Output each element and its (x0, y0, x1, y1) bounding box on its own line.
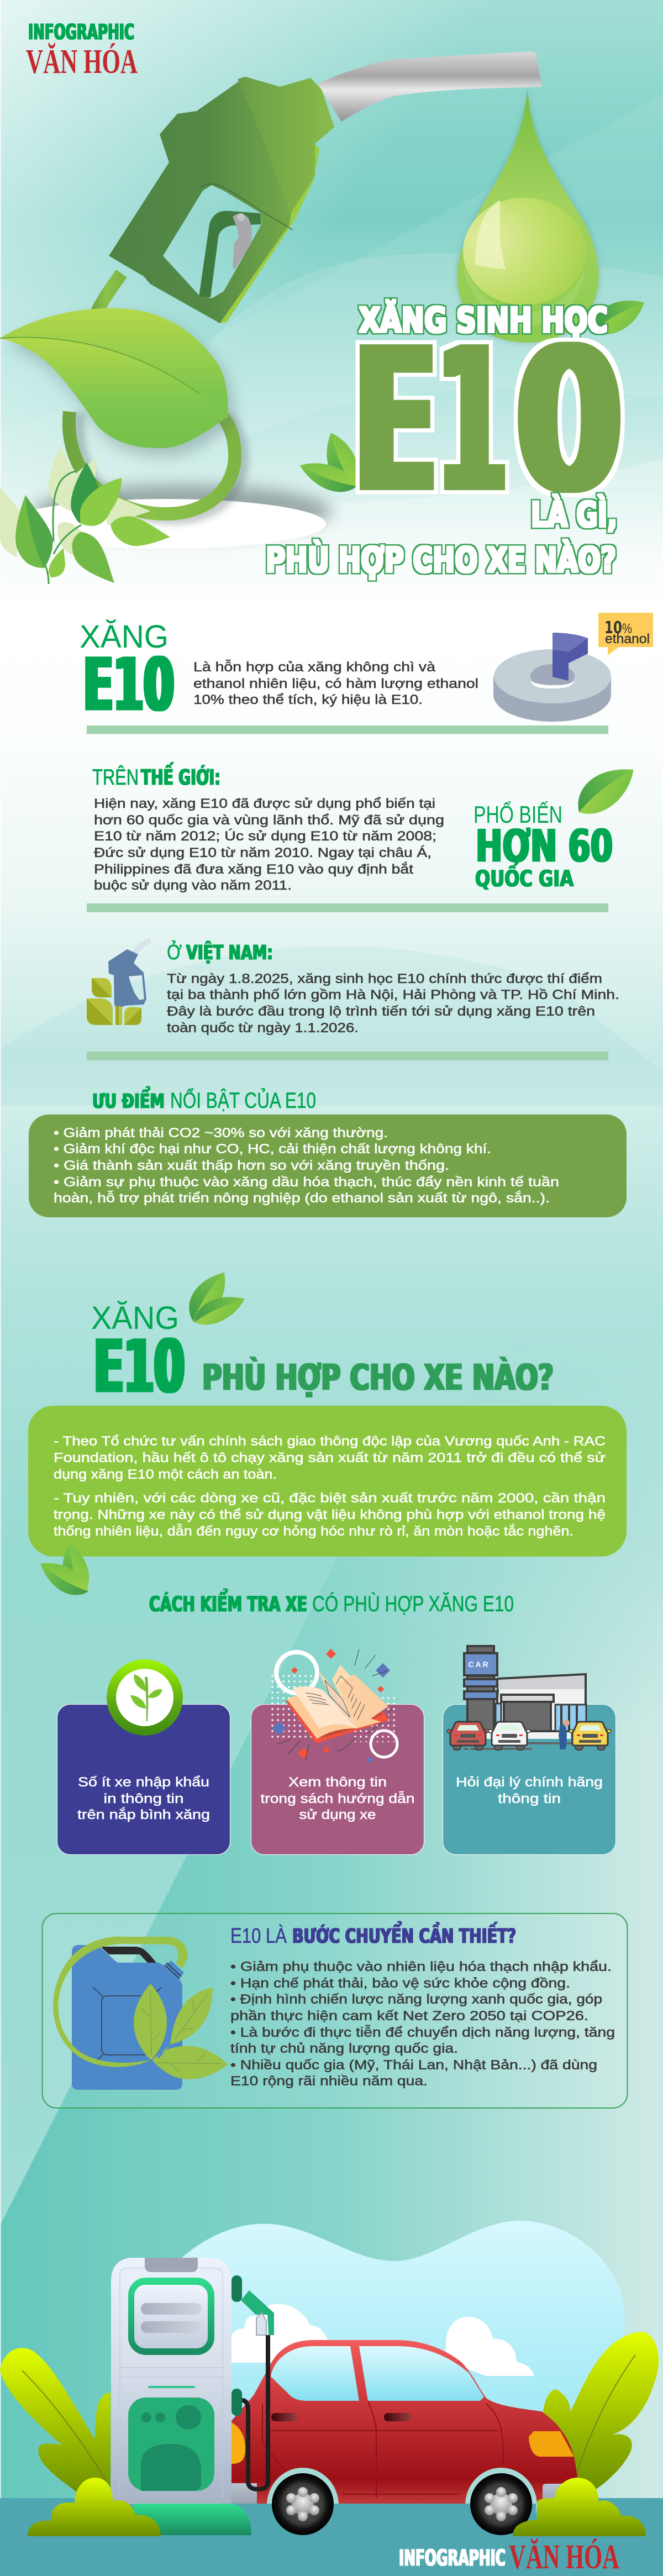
leaf pair (181, 1264, 249, 1332)
logo: Infographic Văn Hóa (26, 20, 138, 81)
heading: Trên thế giới: TRÊN (92, 765, 139, 790)
callout: 10% ethanol: 10 (604, 618, 622, 638)
scene: sky blob and clouds (182, 2221, 625, 2498)
panel: advantages: hoàn, hỗ trợ phát triển nông nghiệp (do ethanol sản xuất từ ngô, sắn..). (54, 1191, 550, 1206)
fuel drop (457, 89, 599, 343)
heading: Xăng E10: E10 (83, 643, 174, 728)
world text: hơn 60 quốc gia và vùng lãnh thổ. Mỹ đã sử dụng (94, 813, 444, 828)
section: phù hợp cho xe nào (28, 1264, 627, 1602)
small leaf cluster (0, 446, 170, 584)
heading: Xăng E10: XĂNG (80, 619, 169, 655)
reasons list: • Giảm phụ thuộc vào nhiên liệu hóa thạch nhập khẩu. (230, 1959, 612, 1974)
section heading: cách kiểm tra: CÁCH KIỂM TRA XE (149, 1589, 307, 1616)
leaf (568, 755, 643, 824)
leaf pair lower (34, 1541, 94, 1602)
callout: phổ biến hơn 60 quốc gia: HƠN 60 (476, 821, 613, 872)
panel: advantages (29, 1114, 627, 1217)
big E10: 1 (438, 305, 506, 538)
definition text: ethanol nhiên liệu, có hàm lượng ethanol (193, 676, 478, 691)
hero title (266, 300, 622, 580)
hose and nozzle (231, 2275, 274, 2489)
definition text (193, 660, 478, 707)
heading (230, 1921, 516, 1948)
reasons list: • Định hình chiến lược năng lượng xanh quốc gia, góp (230, 1992, 602, 2007)
heading: Trên thế giới (92, 763, 220, 790)
heading: BƯỚC CHUYỂN CẦN THIẾT? (292, 1921, 516, 1948)
heading: Ưu điểm nổi bật: NỔI BẬT CỦA E10 (170, 1087, 316, 1113)
panel: suitability: Foundation, hầu hết ô tô chạy xăng sản xuất từ năm 2011 trở đi đều có thể sử (54, 1450, 606, 1465)
world text: Hiện nay, xăng E10 đã được sử dụng phổ biến tại (94, 796, 435, 811)
reasons list: • Hạn chế phát thải, bảo vệ sức khỏe cộng đồng. (230, 1976, 570, 1991)
heading: Xăng E10 phù hợp cho xe nào: PHÙ HỢP CHO XE NÀO? (202, 1357, 554, 1399)
callout: phổ biến hơn 60 quốc gia (473, 800, 613, 892)
Vietnam text: Từ ngày 1.8.2025, xăng sinh học E10 chính thức được thí điểm (167, 971, 602, 986)
card 1: nắp bình xăng: in thông tin (104, 1791, 183, 1806)
callout: 10% ethanol (598, 613, 653, 655)
reasons list: • Nhiều quốc gia (Mỹ, Thái Lan, Nhật Bản...) đã dùng (230, 2058, 597, 2073)
reasons list (230, 1959, 615, 2089)
card 1: nắp bình xăng: trên nắp bình xăng (77, 1807, 210, 1822)
section: Ưu điểm nổi bật (29, 1086, 627, 1217)
big E10 (354, 304, 622, 538)
big E10: 0 (516, 304, 622, 537)
heading: E10 LÀ (230, 1924, 287, 1948)
chart: 10% ethanol donut (493, 633, 611, 722)
heading: Ưu điểm nổi bật: ƯU ĐIỂM (92, 1086, 165, 1113)
icon: open book (269, 1649, 397, 1763)
panel: advantages: • Giảm khí độc hại như CO, HC, cải thiện chất lượng không khí. (54, 1142, 491, 1156)
big E10: E (354, 304, 438, 538)
section: Ở Việt Nam (87, 940, 619, 1035)
bottom logo (399, 2538, 619, 2576)
reasons list: • Là bước đi thực tiễn để chuyển dịch năng lượng, tăng (230, 2025, 615, 2040)
reasons list: phần thực hiện cam kết Net Zero 2050 tại COP26. (230, 2009, 588, 2023)
panel: bước chuyển cần thiết (42, 1913, 628, 2108)
bottom logo: INFOGRAPHIC (399, 2546, 506, 2571)
small leaves beside title (296, 428, 365, 498)
logo: Infographic Văn Hóa: INFOGRAPHIC (28, 20, 134, 44)
panel: suitability: thống nhiên liệu, dẫn đến nguy cơ hỏng hóc như rò rỉ, ăn mòn hoặc tắc nghẽn. (54, 1524, 573, 1539)
card 2: sách hướng dẫn: sử dụng xe (299, 1807, 376, 1822)
icon: car dealership: CAR (468, 1660, 490, 1669)
card 3: đại lý: Hỏi đại lý chính hãng (456, 1775, 603, 1790)
card 2: sách hướng dẫn: Xem thông tin (288, 1775, 387, 1790)
card 3: đại lý: thông tin (498, 1791, 561, 1806)
world text: E10 từ năm 2012; Úc sử dụng E10 từ năm 2008; (94, 829, 436, 844)
hero title: LÀ GÌ, (531, 495, 617, 535)
panel: advantages: • Giá thành sản xuất thấp hơn so với xăng truyền thống. (54, 1158, 449, 1173)
heading: Xăng E10 phù hợp cho xe nào (91, 1300, 554, 1410)
card 1: nắp bình xăng (57, 1659, 230, 1854)
callout: phổ biến hơn 60 quốc gia: PHỔ BIẾN (473, 800, 562, 828)
ground strip (0, 2498, 663, 2576)
heading: Trên thế giới: THẾ GIỚI: (141, 763, 220, 790)
section: Trên thế giới (92, 755, 643, 893)
heading: Xăng E10 phù hợp cho xe nào: E10 (94, 1324, 185, 1410)
definition text: 10% theo thể tích, ký hiệu là E10. (193, 692, 423, 707)
panel: suitability: - Theo Tổ chức tư vấn chính sách giao thông độc lập của Vương quốc Anh - RAC (54, 1434, 606, 1449)
callout: 10% ethanol: % (622, 621, 632, 637)
Vietnam text: Đây là bước đầu trong lộ trình tiến tới sử dụng xăng E10 trên (167, 1004, 595, 1019)
section: Xăng E10 definition (80, 613, 653, 728)
icon: car dealership (447, 1646, 611, 1750)
right leaf behind title (586, 290, 650, 343)
section heading: cách kiểm tra (149, 1589, 514, 1616)
card 2: sách hướng dẫn: trong sách hướng dẫn (261, 1791, 414, 1806)
heading: Ở Việt Nam: VIỆT NAM: (186, 940, 273, 964)
callout: phổ biến hơn 60 quốc gia: QUỐC GIA (475, 862, 573, 892)
panel: suitability: - Tuy nhiên, với các dòng xe cũ, đặc biệt sản xuất trước năm 2000, cần thận (54, 1491, 606, 1506)
world text: Philippines đã đưa xăng E10 vào quy định bắt (94, 862, 413, 877)
icon: sprout circle (107, 1659, 183, 1736)
heading: Ở Việt Nam (167, 940, 273, 964)
definition text: Là hỗn hợp của xăng không chì và (193, 660, 436, 675)
ground ellipse with shadow (6, 485, 332, 549)
fuel hose ring (69, 274, 243, 518)
logo: Infographic Văn Hóa: VĂN HÓA (26, 43, 138, 81)
panel: advantages: • Giảm sự phụ thuộc vào xăng dầu hóa thạch, thúc đẩy nền kinh tế tuần (54, 1175, 559, 1190)
plant left (0, 2348, 112, 2498)
heading: Ưu điểm nổi bật (92, 1086, 316, 1113)
Vietnam text (167, 971, 619, 1035)
panel: suitability: trọng. Những xe này có thể sử dụng vật liệu không phù hợp với ethanol trong hệ (54, 1507, 606, 1522)
fuel pump (111, 2258, 274, 2535)
section heading: cách kiểm tra: CÓ PHÙ HỢP XĂNG E10 (312, 1591, 514, 1616)
plant right (543, 2332, 659, 2492)
reasons list: E10 rộng rãi nhiều năm qua. (230, 2074, 428, 2089)
panel: suitability (28, 1406, 627, 1557)
card 3: đại lý (443, 1646, 615, 1854)
bushes (28, 2478, 646, 2536)
panel: suitability: dụng xăng E10 một cách an toàn. (54, 1467, 277, 1482)
card 2: sách hướng dẫn (251, 1649, 424, 1854)
card 1: nắp bình xăng: Số ít xe nhập khẩu (78, 1775, 209, 1790)
car (231, 2340, 583, 2545)
hero title: XĂNG SINH HỌC (359, 300, 608, 340)
panel: advantages: • Giảm phát thải CO2 ~30% so với xăng thường. (54, 1126, 388, 1140)
icon: jerrycan with leaves (53, 1937, 228, 2090)
world text: Đức sử dụng E10 từ năm 2010. Ngay tại châu Á, (94, 845, 432, 860)
callout: 10% ethanol: ethanol (605, 632, 650, 646)
heading: Xăng E10 phù hợp cho xe nào: XĂNG (91, 1300, 179, 1336)
world text: buộc sử dụng vào năm 2011. (94, 878, 292, 893)
icon: fuel nozzle (109, 51, 542, 323)
icon: blue nozzle with leaves (87, 941, 151, 1025)
Vietnam text: toàn quốc từ ngày 1.1.2026. (167, 1021, 359, 1035)
Vietnam text: tại ba thành phố lớn gồm Hà Nội, Hải Phòng và TP. Hồ Chí Minh. (167, 987, 619, 1002)
world text (94, 796, 444, 893)
heading: Xăng E10 (80, 619, 174, 728)
heading: Ở Việt Nam: Ở (167, 940, 182, 964)
big leaf (0, 308, 234, 456)
reasons list: tính tự chủ năng lượng quốc gia. (230, 2041, 458, 2056)
